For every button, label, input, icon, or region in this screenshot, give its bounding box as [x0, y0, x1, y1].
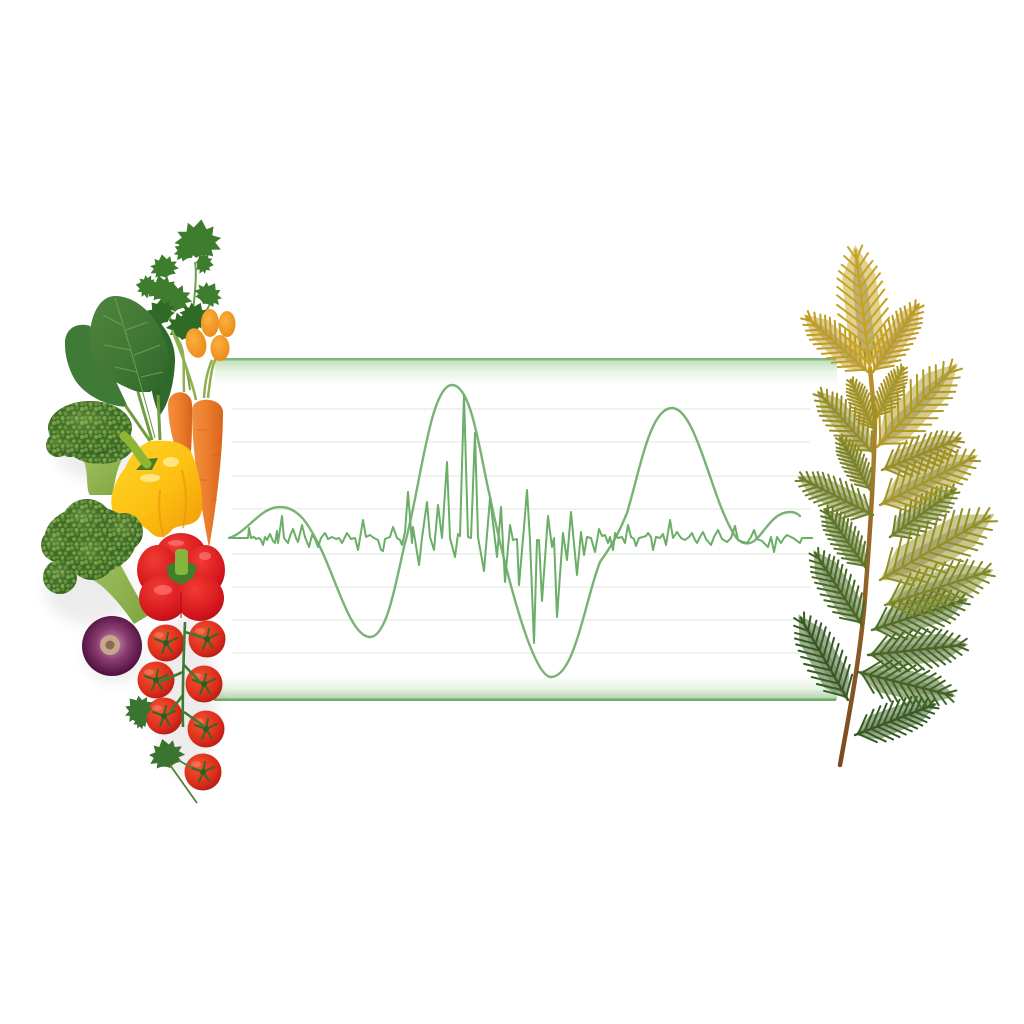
chart: smooth slow wave [229, 385, 800, 677]
icon: red onion [82, 616, 142, 676]
icon: fir branch [781, 242, 1008, 765]
icon: right carrot [192, 400, 223, 548]
icon: left carrot [168, 392, 192, 460]
icon: cherry tomatoes on vine [138, 620, 226, 790]
shadow under vegetables [45, 420, 217, 775]
icon: yellow bell pepper [111, 436, 202, 537]
icon: lower broccoli [41, 499, 149, 624]
main branch stem [840, 368, 875, 765]
icon: orange mini tomatoes [182, 309, 236, 361]
icon: parsley leaves at bottom [118, 689, 197, 803]
chart: jagged noise wave [229, 395, 813, 643]
icon: parsley sprig [134, 216, 227, 400]
icon: spinach leaves [65, 296, 175, 441]
panel: chart band [214, 358, 837, 701]
icon: upper broccoli [46, 401, 134, 495]
icon: red bell pepper [137, 533, 225, 621]
